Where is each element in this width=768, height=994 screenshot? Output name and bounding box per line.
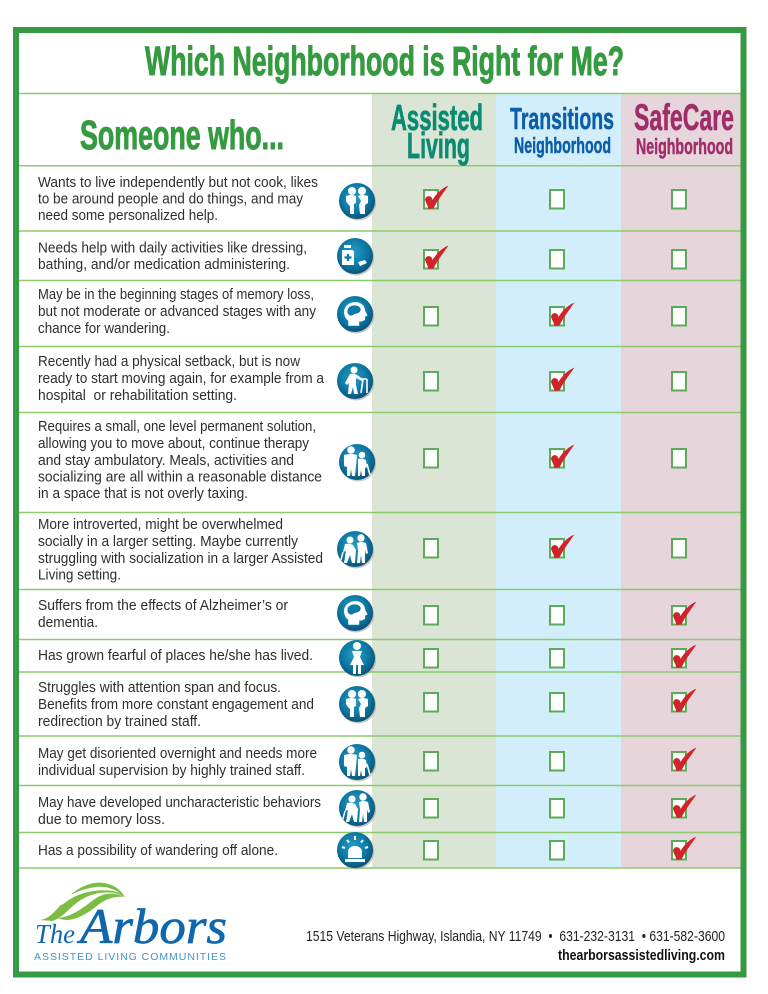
row 9 checkbox: Transitions bbox=[550, 693, 564, 712]
row 7 text: Suffers from the effects of Alzheimer’s or bbox=[38, 597, 288, 614]
row 9 text: redirection by trained staff. bbox=[38, 713, 201, 730]
row 7 checkbox: Assisted Living bbox=[424, 606, 438, 624]
row 7 text bbox=[38, 597, 288, 631]
footer website: thearborsassistedliving.com bbox=[558, 948, 725, 964]
row 4 checkbox: Transitions checked bbox=[550, 368, 574, 391]
column header: Assisted Living bbox=[391, 97, 483, 166]
logo wordmark: Arbors bbox=[77, 898, 227, 954]
icon: alarm beacon bbox=[337, 832, 374, 870]
row 4 checkbox: Assisted Living bbox=[424, 372, 438, 390]
row 5 text bbox=[38, 418, 322, 502]
row 5 checkbox: Assisted Living bbox=[424, 449, 438, 468]
row 10 text: May get disoriented overnight and needs more bbox=[38, 745, 317, 762]
column header: Assisted Living: Living bbox=[407, 125, 470, 166]
row 3 checkbox: Transitions checked bbox=[550, 302, 574, 326]
column header: Transitions Neighborhood: Transitions bbox=[510, 101, 614, 136]
row 2 text bbox=[38, 240, 307, 273]
row 4 text: ready to start moving again, for example from a bbox=[38, 370, 325, 387]
row 5 text: socializing are all within a reasonable distance bbox=[38, 468, 322, 486]
column tint: Assisted Living bbox=[372, 94, 496, 868]
column header: SafeCare Neighborhood bbox=[634, 97, 734, 159]
row 6 text: Living setting. bbox=[38, 566, 121, 584]
row 9 text bbox=[38, 679, 314, 730]
row 1 text: Wants to live independently but not cook, likes bbox=[38, 174, 318, 191]
row 9 checkbox: SafeCare checked bbox=[672, 688, 696, 712]
row 9 checkbox: Assisted Living bbox=[424, 693, 438, 712]
row 11 text bbox=[38, 794, 321, 828]
row 7 checkbox: Transitions bbox=[550, 606, 564, 624]
row 9 text: Struggles with attention span and focus. bbox=[38, 679, 281, 696]
row 7 text: dementia. bbox=[38, 614, 98, 631]
heading: Someone who: Someone who... bbox=[80, 112, 284, 158]
row 12 text: Has a possibility of wandering off alone. bbox=[38, 842, 278, 859]
icon: elderly pair bbox=[337, 531, 374, 568]
icon: caregiver with elder bbox=[339, 444, 376, 482]
row 11 text: May have developed uncharacteristic behaviors bbox=[38, 794, 321, 811]
row 6 text bbox=[38, 516, 323, 584]
row 10 checkbox: Transitions bbox=[550, 752, 564, 770]
icon: couple bbox=[339, 686, 376, 724]
row 3 text: chance for wandering. bbox=[38, 320, 170, 337]
row 1 checkbox: Transitions bbox=[550, 190, 564, 208]
row 6 checkbox: Assisted Living bbox=[424, 539, 438, 558]
row 8 checkbox: Assisted Living bbox=[424, 649, 438, 668]
row 7 checkbox: SafeCare checked bbox=[672, 602, 696, 625]
row 10 text bbox=[38, 745, 317, 779]
row 3 checkbox: Assisted Living bbox=[424, 307, 438, 326]
row 3 text bbox=[38, 286, 316, 337]
column tint: Transitions bbox=[496, 94, 621, 868]
row 8 checkbox: Transitions bbox=[550, 649, 564, 668]
icon: head with brain bbox=[337, 296, 374, 334]
row 3 text: May be in the beginning stages of memory loss, bbox=[38, 286, 314, 303]
icon: medication bbox=[337, 238, 374, 276]
row 2 checkbox: SafeCare bbox=[672, 250, 686, 268]
row 6 text: struggling with socialization in a larger Assisted bbox=[38, 550, 323, 567]
row 2 checkbox: Transitions bbox=[550, 250, 564, 268]
row 10 text: individual supervision by highly trained staff. bbox=[38, 762, 305, 779]
row 12 checkbox: Transitions bbox=[550, 841, 564, 860]
row 5 text: allowing you to move about, continue therapy bbox=[38, 435, 309, 452]
row 5 checkbox: SafeCare bbox=[672, 449, 686, 468]
row 11 checkbox: Assisted Living bbox=[424, 799, 438, 818]
row 1 text bbox=[38, 174, 318, 224]
column header: Assisted Living: Assisted bbox=[391, 97, 483, 138]
row 6 checkbox: Transitions checked bbox=[550, 534, 574, 558]
row 4 text bbox=[38, 353, 325, 404]
logo: The Arbors bbox=[34, 883, 227, 963]
row 2 checkbox: Assisted Living checked bbox=[424, 246, 448, 269]
row 1 checkbox: Assisted Living checked bbox=[424, 186, 448, 209]
icon: head with brain bbox=[337, 595, 374, 632]
row 11 checkbox: SafeCare checked bbox=[672, 794, 696, 818]
row 4 text: Recently had a physical setback, but is now bbox=[38, 353, 300, 370]
row 6 checkbox: SafeCare bbox=[672, 539, 686, 558]
row 11 text: due to memory loss. bbox=[38, 811, 165, 828]
row 5 text: in a space that is not overly taxing. bbox=[38, 485, 248, 502]
row 1 text: need some personalized help. bbox=[38, 207, 218, 224]
icon: person with walker bbox=[337, 363, 374, 400]
row 6 text: socially in a larger setting. Maybe currently bbox=[38, 533, 298, 550]
row 12 checkbox: SafeCare checked bbox=[672, 836, 696, 860]
row 8 checkbox: SafeCare checked bbox=[672, 644, 696, 668]
row 10 checkbox: Assisted Living bbox=[424, 752, 438, 770]
row 4 checkbox: SafeCare bbox=[672, 372, 686, 390]
row 5 text: Requires a small, one level permanent solution, bbox=[38, 418, 316, 435]
row 12 checkbox: Assisted Living bbox=[424, 841, 438, 860]
row 4 text: hospital or rehabilitation setting. bbox=[38, 387, 237, 404]
row 8 text: Has grown fearful of places he/she has lived. bbox=[38, 647, 313, 664]
row 9 text: Benefits from more constant engagement and bbox=[38, 696, 314, 713]
row 10 checkbox: SafeCare checked bbox=[672, 748, 696, 771]
column header: Transitions Neighborhood bbox=[510, 101, 614, 158]
row 11 checkbox: Transitions bbox=[550, 799, 564, 818]
row 5 text: and stay ambulatory. Meals, activities and bbox=[38, 452, 294, 469]
icon: caregiver with elder bbox=[339, 744, 376, 782]
logo leaf bbox=[40, 883, 125, 921]
row 5 checkbox: Transitions checked bbox=[550, 444, 574, 468]
row 2 text: Needs help with daily activities like dressing, bbox=[38, 240, 307, 256]
icon: couple bbox=[339, 183, 376, 220]
logo tagline: ASSISTED LIVING COMMUNITIES bbox=[34, 951, 226, 963]
icon: fearful woman bbox=[339, 640, 376, 678]
column tint: SafeCare bbox=[621, 94, 741, 868]
column header: Transitions Neighborhood: Neighborhood bbox=[514, 133, 611, 158]
logo wordmark: The bbox=[35, 919, 75, 949]
row 1 checkbox: SafeCare bbox=[672, 190, 686, 208]
row 6 text: More introverted, might be overwhelmed bbox=[38, 516, 283, 533]
row 3 text: but not moderate or advanced stages with any bbox=[38, 303, 316, 320]
icon: elderly pair bbox=[339, 790, 376, 828]
row 3 checkbox: SafeCare bbox=[672, 307, 686, 326]
row 1 text: to be around people and do things, and may bbox=[38, 190, 303, 208]
row 2 text: bathing, and/or medication administering. bbox=[38, 256, 290, 273]
